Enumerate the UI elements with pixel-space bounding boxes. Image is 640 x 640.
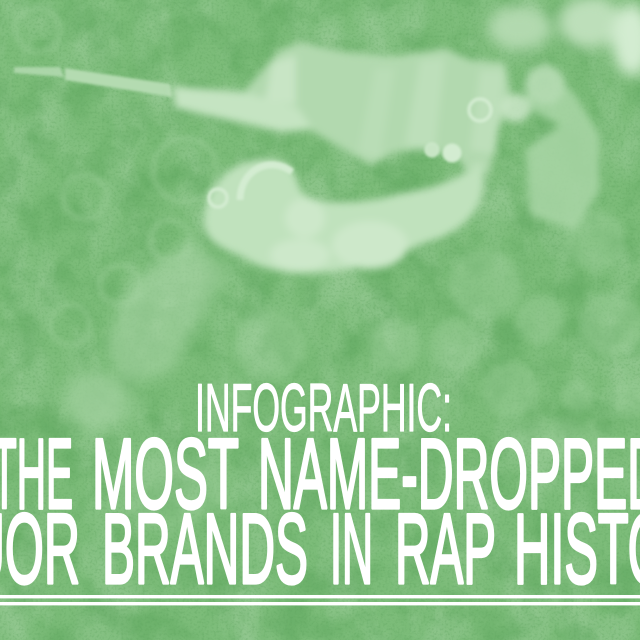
photo: forearm below hand — [65, 240, 230, 430]
photo: fist holding microphone — [172, 42, 512, 175]
photo: bright bokeh rings — [209, 99, 491, 207]
title line: LIQUOR BRANDS IN RAP HISTORY: RAP — [395, 493, 496, 605]
title line: LIQUOR BRANDS IN RAP HISTORY: IN — [330, 493, 373, 605]
photo: bright blobs top right — [488, 0, 640, 76]
double rule under title — [0, 595, 640, 605]
bubbles fading behind the title — [74, 378, 610, 526]
faint bubbles — [16, 8, 217, 345]
title line: THE MOST NAME-DROPPED — [0, 418, 640, 530]
title block — [0, 370, 640, 605]
photo: thumb and lower hand — [204, 159, 484, 273]
photo: microphone cable — [14, 67, 172, 97]
soft bubbles lower right — [234, 210, 640, 418]
title line: THE MOST NAME-DROPPED: MOST — [92, 418, 239, 530]
title line: LIQUOR BRANDS IN RAP HISTORY — [0, 493, 640, 605]
photo: right side of hand — [499, 60, 600, 230]
title line: LIQUOR BRANDS IN RAP HISTORY: BRANDS — [102, 493, 308, 605]
